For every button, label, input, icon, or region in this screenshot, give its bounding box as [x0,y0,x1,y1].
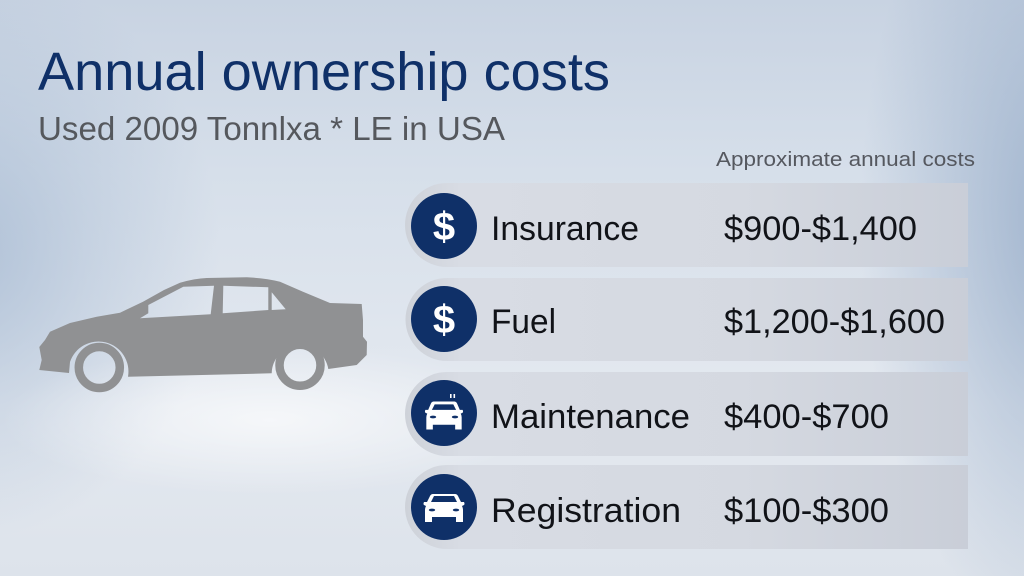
rear wheel [280,345,320,386]
row background [405,372,968,456]
illustration: car silhouette [39,277,367,388]
value: $900-$1,400 [724,210,917,248]
row: maintenance [405,372,968,456]
icon: dollar: $ [433,205,455,249]
icon: dollar [411,286,477,352]
label: Fuel [491,303,556,341]
label: Maintenance [491,398,690,436]
column heading: Approximate annual costs [716,149,975,171]
value: $1,200-$1,600 [724,303,945,341]
value: $100-$300 [724,492,889,530]
row: registration [405,465,968,549]
label: Registration [491,492,681,530]
subtitle: Used 2009 Tonnlxa * LE in USA [38,110,505,147]
title: Annual ownership costs [38,42,610,102]
row background [405,183,968,267]
row background [405,465,968,549]
front wheel [79,347,120,388]
icon: dollar: $ [433,298,455,342]
row: fuel [405,278,968,361]
icon: car [411,474,477,540]
icon: dollar [411,193,477,259]
icon: car with warning lights [411,380,477,446]
row background [405,278,968,361]
row: insurance [405,183,968,267]
value: $400-$700 [724,398,889,436]
label: Insurance [491,210,639,248]
